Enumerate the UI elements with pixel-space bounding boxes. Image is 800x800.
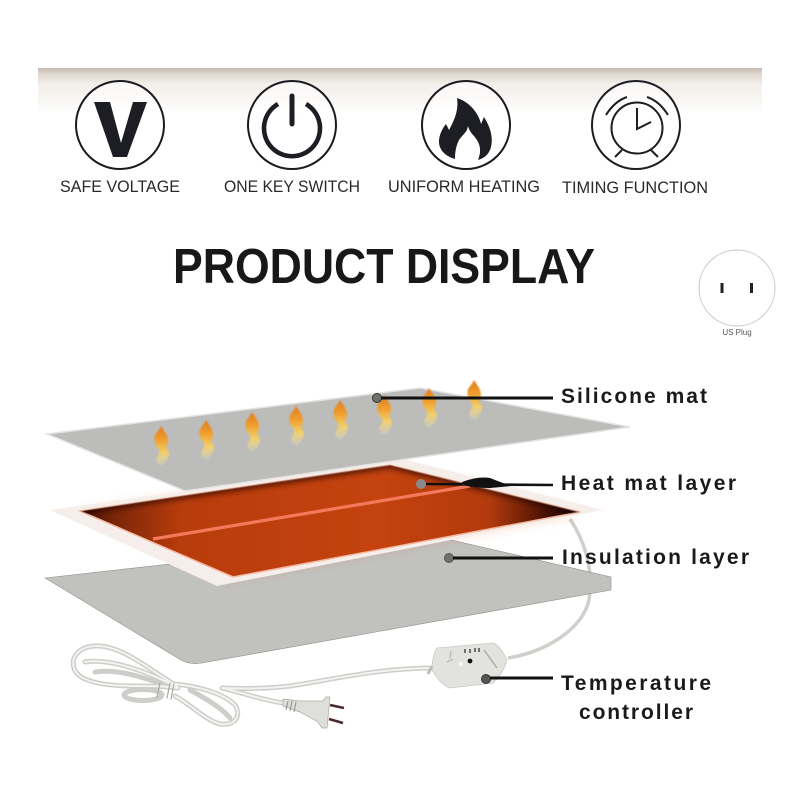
heat mat outer frame (50, 460, 603, 586)
label: temperature controller: Temperature (561, 672, 711, 695)
coiled power cord (73, 646, 432, 724)
feature: uniform heating (388, 81, 540, 196)
top decorative band (38, 68, 762, 114)
callout: insulation layer (444, 546, 749, 569)
feature: timing function (562, 81, 708, 197)
layer: silicone mat (47, 388, 630, 491)
exploded product diagram (45, 380, 749, 728)
heat mat top edge shadow (80, 465, 580, 512)
feature icons row (60, 81, 708, 197)
callout: heat mat layer (416, 472, 736, 495)
temperature controller (428, 643, 507, 688)
feature: safe voltage (60, 81, 180, 196)
label: US Plug: US Plug (722, 328, 752, 337)
label: heat mat layer: Heat mat layer (561, 472, 736, 495)
heat mat red glow (80, 467, 580, 578)
infographic canvas (38, 68, 776, 728)
heat mat inner panel (80, 465, 580, 577)
heating wire (153, 486, 470, 539)
right power cable (508, 519, 590, 658)
US power plug (283, 697, 344, 728)
icon: alarm clock (592, 81, 680, 169)
callout: silicone mat (372, 385, 707, 408)
callout: temperature controller (482, 672, 711, 724)
icon: power button (248, 81, 336, 169)
label: timing function: TIMING FUNCTION (562, 179, 708, 197)
icon: letter V in circle (76, 81, 164, 169)
layer: heat mat (50, 460, 603, 586)
label: safe voltage: SAFE VOLTAGE (60, 178, 180, 196)
layer: insulation (45, 535, 611, 664)
label: one key switch: ONE KEY SWITCH (224, 178, 360, 196)
icon: flame (422, 81, 510, 169)
title: PRODUCT DISPLAY (173, 240, 595, 294)
label: temperature controller: controller (579, 701, 693, 724)
feature: one key switch (224, 81, 360, 196)
rising heat flames (154, 380, 482, 466)
US plug badge (699, 250, 775, 337)
label: insulation layer: Insulation layer (562, 546, 749, 569)
label: silicone mat: Silicone mat (561, 385, 707, 408)
label: uniform heating: UNIFORM HEATING (388, 178, 540, 196)
